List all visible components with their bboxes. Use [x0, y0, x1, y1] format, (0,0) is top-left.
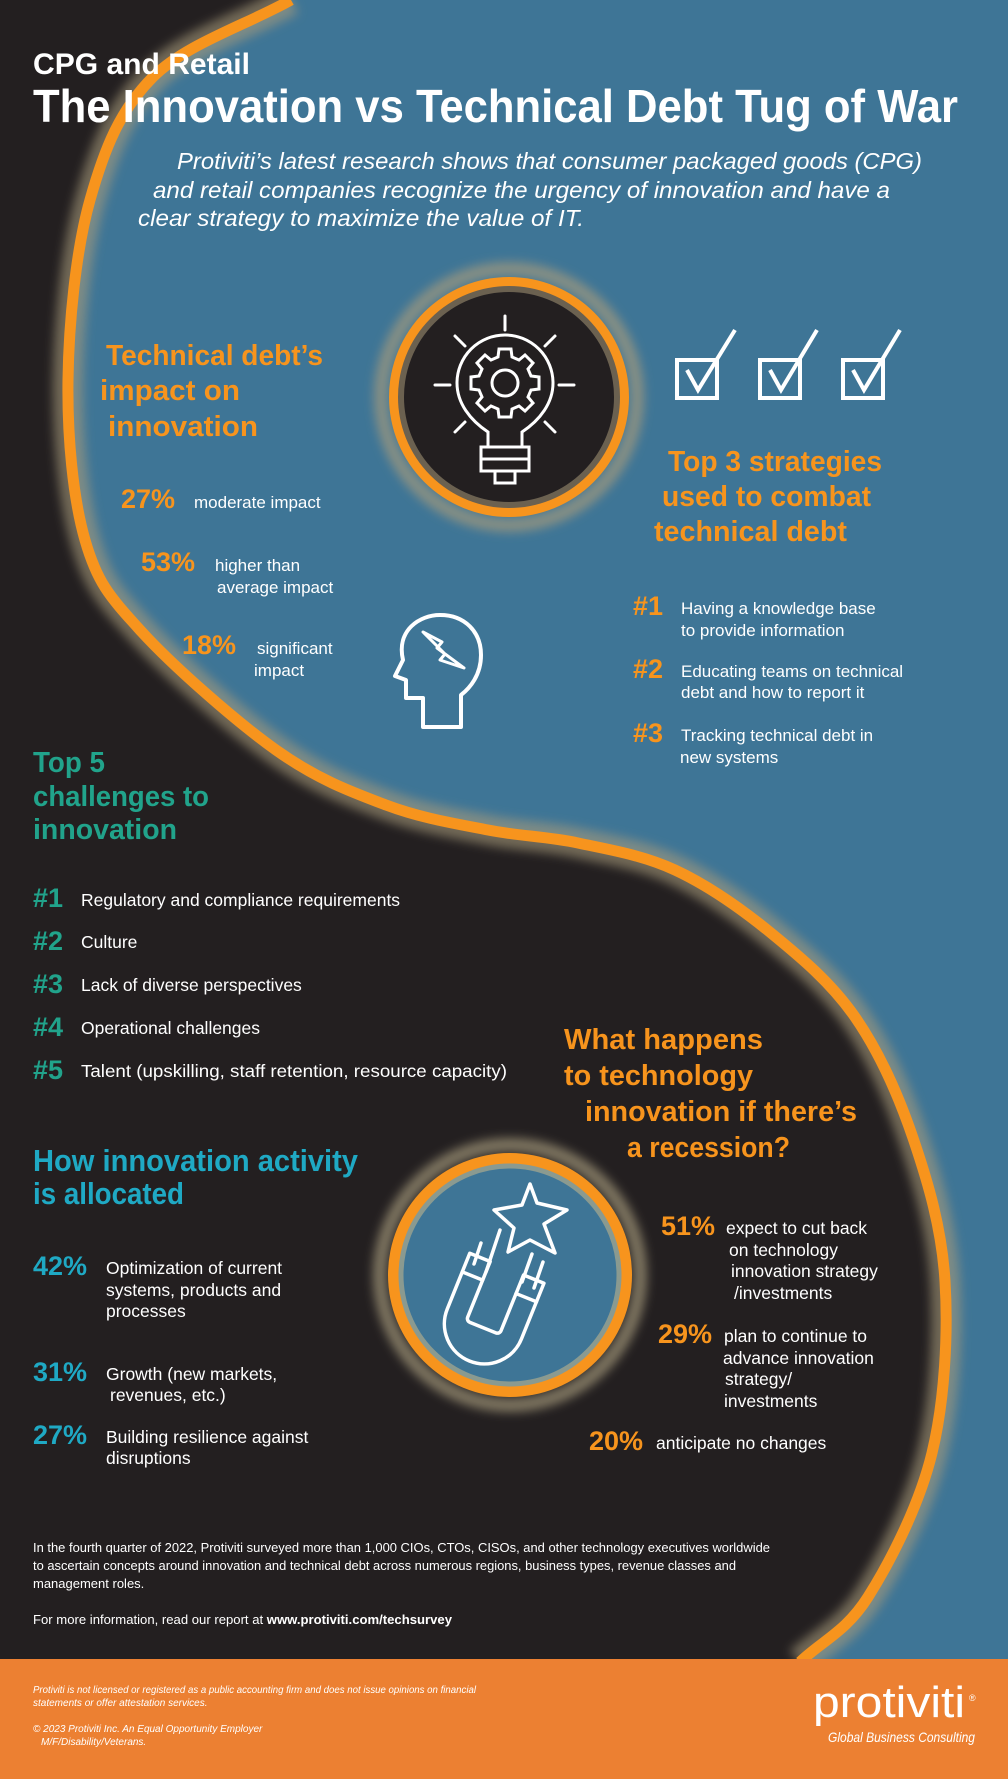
intro text: clear strategy to maximize the value of IT. — [138, 205, 584, 231]
footer band — [0, 1659, 1008, 1779]
heading: innovation allocation — [33, 1143, 359, 1211]
survey methodology text: to ascertain concepts around innovation and technical debt across numerous regions, business types, revenue classes and — [33, 1558, 736, 1573]
logo: protiviti: Global Business Consulting — [828, 1729, 975, 1745]
challenges list: #4 — [33, 1012, 63, 1042]
allocation stats: 27% — [33, 1420, 87, 1450]
impact stats: impact — [254, 661, 304, 680]
recession stats: investments — [724, 1391, 818, 1411]
logo: protiviti — [813, 1678, 976, 1745]
allocation stats: 42% — [33, 1251, 87, 1281]
strategies list: Having a knowledge base — [681, 599, 876, 618]
strategies list: #2 — [633, 654, 663, 684]
challenges list: Operational challenges — [81, 1018, 260, 1038]
impact stats: 53% — [141, 547, 195, 577]
strategies list: debt and how to report it — [681, 683, 865, 702]
intro text — [138, 148, 922, 231]
heading: recession: to technology — [564, 1060, 753, 1092]
strategies list: to provide information — [681, 621, 844, 640]
title block: CPG and Retail — [33, 48, 250, 81]
recession stats: on technology — [729, 1240, 838, 1260]
impact stats: 27% — [121, 484, 175, 514]
recession stats: innovation strategy — [731, 1261, 878, 1281]
recession stats: plan to continue to — [724, 1326, 867, 1346]
allocation stats: revenues, etc.) — [110, 1385, 226, 1405]
heading: recession — [564, 1024, 857, 1164]
heading: technical debt's impact — [100, 340, 323, 443]
recession stats: expect to cut back — [726, 1218, 867, 1238]
strategies list: #3 — [633, 718, 663, 748]
icon: magnet and star — [432, 1184, 567, 1376]
strategies list: #1 — [633, 591, 663, 621]
strategies list — [633, 591, 903, 767]
challenges list: #2 — [33, 926, 63, 956]
icon: three checkboxes — [677, 330, 900, 398]
allocation stats: 31% — [33, 1357, 87, 1387]
heading: technical debt's impact: Technical debt’s — [106, 340, 323, 372]
logo: protiviti: ® — [969, 1693, 976, 1703]
challenges list: Talent (upskilling, staff retention, resource capacity) — [81, 1061, 507, 1081]
disclaimer text: M/F/Disability/Veterans. — [41, 1737, 146, 1748]
title block — [33, 48, 958, 132]
heading: technical debt's impact: impact on — [100, 375, 240, 407]
disclaimer text: statements or offer attestation services. — [33, 1698, 208, 1709]
heading: top 3 strategies: technical debt — [654, 516, 847, 548]
impact stats: 18% — [182, 630, 236, 660]
challenges list: Culture — [81, 932, 137, 952]
icon: lightbulb gear — [435, 316, 574, 483]
recession stats: anticipate no changes — [656, 1433, 827, 1453]
icon: head with lightning — [395, 615, 481, 727]
recession stats: strategy/ — [725, 1369, 792, 1389]
logo: protiviti: protiviti — [813, 1678, 965, 1727]
top circle with lightbulb — [381, 269, 637, 525]
heading: top 3 strategies: used to combat — [662, 481, 871, 513]
allocation stats: processes — [106, 1301, 186, 1321]
allocation stats: disruptions — [106, 1448, 191, 1468]
heading: recession: innovation if there’s — [585, 1096, 857, 1128]
impact stats — [121, 484, 334, 680]
survey methodology text — [33, 1540, 770, 1627]
heading: top 5 challenges: challenges to — [33, 781, 209, 813]
intro text: Protiviti’s latest research shows that consumer packaged goods (CPG) — [177, 148, 922, 174]
survey methodology text: For more information, read our report at www.protiviti.com/techsurvey — [33, 1612, 453, 1627]
challenges list: Regulatory and compliance requirements — [81, 890, 400, 910]
impact stats: moderate impact — [194, 493, 321, 512]
strategies list: new systems — [680, 748, 778, 767]
heading: top 5 challenges: innovation — [33, 814, 177, 846]
heading: recession: a recession? — [627, 1132, 790, 1164]
survey methodology text: management roles. — [33, 1576, 144, 1591]
heading: technical debt's impact: innovation — [108, 411, 258, 443]
recession stats — [589, 1211, 878, 1456]
heading: top 5 challenges — [33, 747, 209, 846]
challenges list: #5 — [33, 1055, 63, 1085]
challenges list: #1 — [33, 883, 63, 913]
impact stats: average impact — [217, 578, 334, 597]
impact stats: higher than — [215, 556, 300, 575]
allocation stats — [33, 1251, 308, 1468]
allocation stats: Optimization of current — [106, 1258, 282, 1278]
challenges list: #3 — [33, 969, 63, 999]
allocation stats: systems, products and — [106, 1280, 281, 1300]
allocation stats: Growth (new markets, — [106, 1364, 277, 1384]
heading: top 5 challenges: Top 5 — [33, 747, 105, 779]
disclaimer text: © 2023 Protiviti Inc. An Equal Opportunity Employer — [33, 1724, 263, 1735]
strategies list: Tracking technical debt in — [681, 726, 873, 745]
strategies list: Educating teams on technical — [681, 662, 903, 681]
recession stats: 29% — [658, 1319, 712, 1349]
heading: recession: What happens — [564, 1024, 763, 1056]
heading: top 3 strategies: Top 3 strategies — [668, 446, 882, 478]
recession stats: 51% — [661, 1211, 715, 1241]
heading: top 3 strategies — [654, 446, 882, 548]
disclaimer text: Protiviti is not licensed or registered as a public accounting firm and does not issue opinions on financial — [33, 1685, 477, 1696]
impact stats: significant — [257, 639, 333, 658]
disclaimer text — [33, 1685, 477, 1748]
survey methodology text: In the fourth quarter of 2022, Protiviti surveyed more than 1,000 CIOs, CTOs, CISOs, and other technology executives worldwide — [33, 1540, 770, 1555]
challenges list — [33, 883, 507, 1085]
challenges list: Lack of diverse perspectives — [81, 975, 302, 995]
bottom circle with magnet — [380, 1145, 640, 1405]
allocation stats: Building resilience against — [106, 1427, 308, 1447]
recession stats: 20% — [589, 1426, 643, 1456]
heading: innovation allocation: How innovation activity — [33, 1143, 359, 1178]
recession stats: advance innovation — [723, 1348, 874, 1368]
title block: The Innovation vs Technical Debt Tug of War — [33, 80, 958, 132]
recession stats: /investments — [734, 1283, 832, 1303]
heading: innovation allocation: is allocated — [33, 1176, 184, 1211]
intro text: and retail companies recognize the urgency of innovation and have a — [153, 177, 890, 203]
